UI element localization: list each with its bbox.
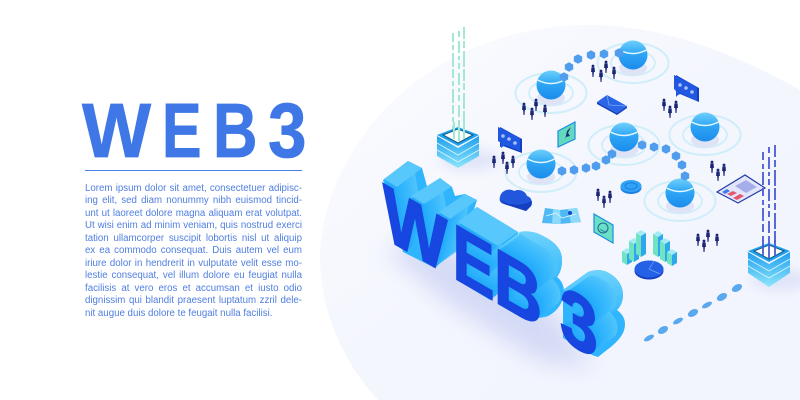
right data column: [763, 145, 775, 255]
network nodes: spheres with rings: [506, 40, 740, 221]
icon: document panel: [717, 175, 765, 203]
ground shadows: [385, 150, 800, 368]
body paragraph: tation ullamcorper suscipit lobortis nisl ut aliquip: [85, 232, 302, 244]
title: [82, 88, 307, 174]
body paragraph: Lorem ipsum dolor sit amet, consectetuer adipisc-: [85, 182, 302, 194]
body paragraph: dignissim qui blandit praesent luptatum zzril dele-: [85, 295, 302, 306]
body paragraph: nit augue duis dolore te feugait nulla facilisi.: [85, 308, 272, 318]
3D WEB3 lettering: B: [494, 230, 542, 346]
body paragraph: lestie consequat, vel illum dolore eu feugiat nulla: [85, 270, 302, 281]
body paragraph: facilisis at vero eros et accumsan et iusto odio: [85, 282, 302, 294]
title: W: [82, 88, 151, 174]
title: 3: [268, 88, 307, 174]
body paragraph: ex ea commodo consequat. Duis autem vel eum: [85, 245, 302, 256]
right server block: [748, 240, 790, 287]
icon: picture panel: [558, 122, 575, 147]
icon: map: [542, 208, 581, 224]
pie chart: [634, 260, 664, 280]
divider rule: [85, 170, 302, 171]
dashed bead trail: [643, 282, 743, 343]
title: E: [162, 88, 201, 174]
body paragraph: [85, 182, 302, 318]
3D WEB3 lettering: W: [383, 166, 447, 291]
body paragraph: ing elit, sed diam nonummy nibh euismod tincid-: [85, 195, 302, 206]
3D WEB3 lettering: E: [453, 206, 494, 318]
body paragraph: iriure dolor in hendrerit in vulputate velit esse mo-: [85, 258, 302, 268]
left data column: [453, 27, 464, 137]
icon: chat bubble right: [674, 75, 699, 102]
chain of blocks: [558, 48, 689, 181]
icon: envelope: [597, 95, 627, 115]
icon: coin: [620, 180, 642, 194]
3D WEB3 lettering: 3: [560, 267, 598, 377]
bar chart: [622, 230, 677, 266]
icon: chat bubble left: [498, 127, 522, 153]
body paragraph: unt ut laoreet dolore magna aliquam erat volutpat.: [85, 208, 302, 218]
groups of people: [492, 61, 726, 252]
left server block: [437, 122, 479, 168]
icon: cloud: [500, 190, 532, 211]
body paragraph: Ut wisi enim ad minim veniam, quis nostrud exerci: [85, 220, 302, 231]
icon: face panel: [594, 214, 613, 243]
title: B: [212, 88, 257, 174]
background blob: [320, 25, 800, 400]
